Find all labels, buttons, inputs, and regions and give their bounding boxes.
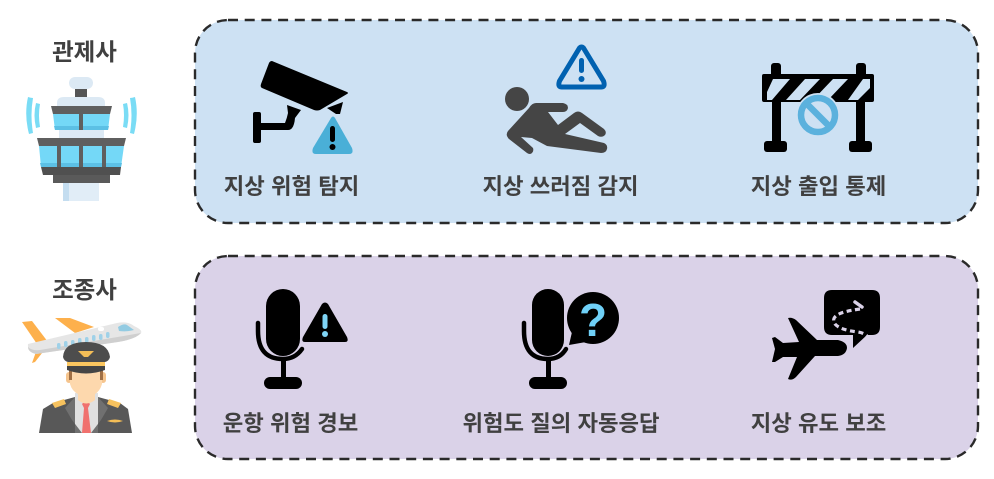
icon: control tower xyxy=(26,77,137,201)
icon: microphone with warning xyxy=(258,289,348,389)
icon: airplane with route bubble xyxy=(772,290,880,380)
icon: CCTV camera with warning xyxy=(253,61,353,154)
label: risk query auto response: 위험도 질의 자동응답 xyxy=(462,411,660,436)
label: ground fall detection: 지상 쓰러짐 감지 xyxy=(483,174,638,199)
heading: controller: 관제사 xyxy=(52,39,117,65)
icon: barricade with prohibition xyxy=(762,63,874,152)
label: operation hazard warning: 운항 위험 경보 xyxy=(223,411,358,436)
panel: pilot xyxy=(195,256,978,459)
panel: air traffic controller xyxy=(195,20,978,223)
icon: microphone with question bubble: ? xyxy=(579,294,607,346)
icon: pilot with airplane xyxy=(22,318,141,433)
icon: microphone with question bubble xyxy=(524,289,619,389)
label: ground guidance assistance: 지상 유도 보조 xyxy=(751,411,886,436)
heading: pilot: 조종사 xyxy=(52,277,117,303)
icon: person falling with warning xyxy=(505,47,607,154)
label: ground access control: 지상 출입 통제 xyxy=(751,174,886,199)
label: ground hazard detection: 지상 위험 탐지 xyxy=(224,174,359,199)
